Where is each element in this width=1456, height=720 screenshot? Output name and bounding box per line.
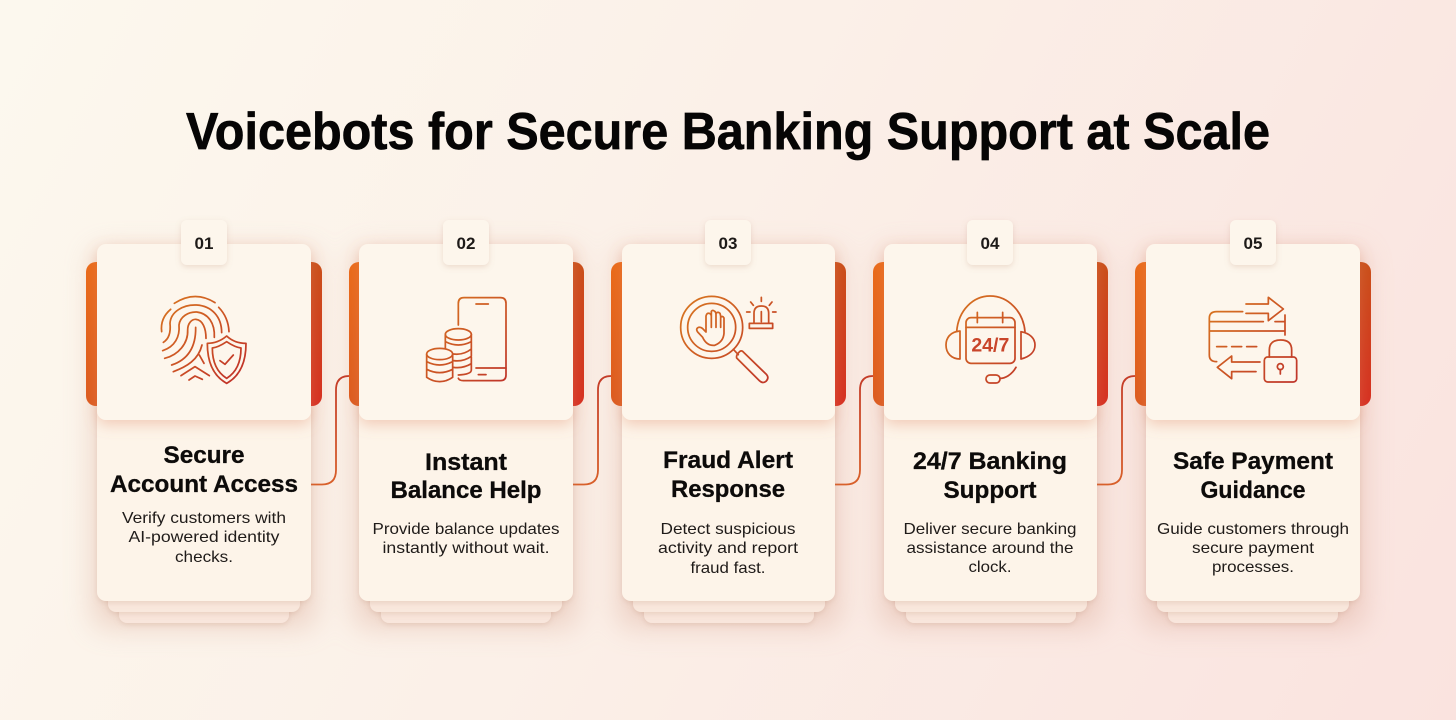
description (658, 521, 799, 577)
description: assistance around the (906, 540, 1074, 557)
heading: Instant (425, 449, 507, 476)
heading: Secure (164, 442, 244, 469)
number badge 05: 05 (1244, 234, 1262, 253)
number badge 05 (1230, 220, 1276, 265)
connector: step 2 to 3 (573, 376, 614, 484)
description: Provide balance updates (372, 521, 560, 538)
connector: step 4 to 5 (1097, 376, 1138, 484)
description: fraud fast. (690, 560, 766, 577)
panel: step 5 safe payment guidance (1135, 220, 1371, 623)
number badge 03: 03 (719, 234, 737, 253)
description (904, 521, 1076, 576)
description: AI-powered identity (128, 529, 280, 546)
description: instantly without wait. (382, 540, 550, 557)
description: Verify customers with (122, 510, 286, 527)
heading: Safe Payment (1173, 448, 1333, 475)
number badge 04 (967, 220, 1013, 265)
description: Detect suspicious (660, 521, 796, 538)
panel: step 3 fraud alert response (611, 220, 846, 623)
panel: step 2 instant balance help (349, 220, 584, 623)
heading (110, 442, 298, 498)
heading: Support (944, 477, 1037, 504)
description: secure payment (1192, 540, 1315, 557)
number badge 01 (181, 220, 227, 265)
icon: card, arrows and padlock (1209, 297, 1297, 382)
icon: fingerprint with shield (161, 296, 246, 383)
description (1157, 521, 1349, 576)
number badge 02 (443, 220, 489, 265)
description: Guide customers through (1157, 521, 1349, 538)
description: Deliver secure banking (904, 521, 1076, 538)
title: Voicebots for Secure Banking Support at Scale (186, 103, 1270, 161)
number badge 04: 04 (981, 234, 1000, 253)
heading: 24/7 Banking (913, 448, 1067, 475)
heading (1173, 448, 1333, 504)
connector: step 1 to 2 (311, 376, 352, 484)
description (372, 521, 560, 557)
heading (390, 449, 542, 504)
description: processes. (1212, 559, 1294, 576)
icon: headset with 24/7 calendar (946, 296, 1035, 383)
heading (663, 447, 793, 503)
description: activity and report (658, 540, 799, 557)
connector: step 3 to 4 (835, 376, 876, 484)
number badge 02: 02 (457, 234, 475, 253)
heading: Fraud Alert (663, 447, 793, 474)
heading: Guidance (1200, 477, 1306, 504)
panel: step 4 24/7 banking support (873, 220, 1108, 623)
description: checks. (175, 549, 233, 566)
heading: Balance Help (390, 477, 542, 504)
heading: Account Access (110, 471, 298, 498)
icon: headset with 24/7 calendar: 24/7 (971, 336, 1009, 357)
panel: step 1 secure account access (86, 220, 322, 623)
heading (913, 448, 1067, 504)
heading: Response (671, 476, 785, 503)
icon: phone and coins (427, 298, 506, 382)
description (122, 510, 286, 566)
number badge 01: 01 (195, 234, 213, 253)
icon: magnifier with hand and siren (681, 296, 776, 383)
description: clock. (968, 559, 1012, 576)
number badge 03 (705, 220, 751, 265)
